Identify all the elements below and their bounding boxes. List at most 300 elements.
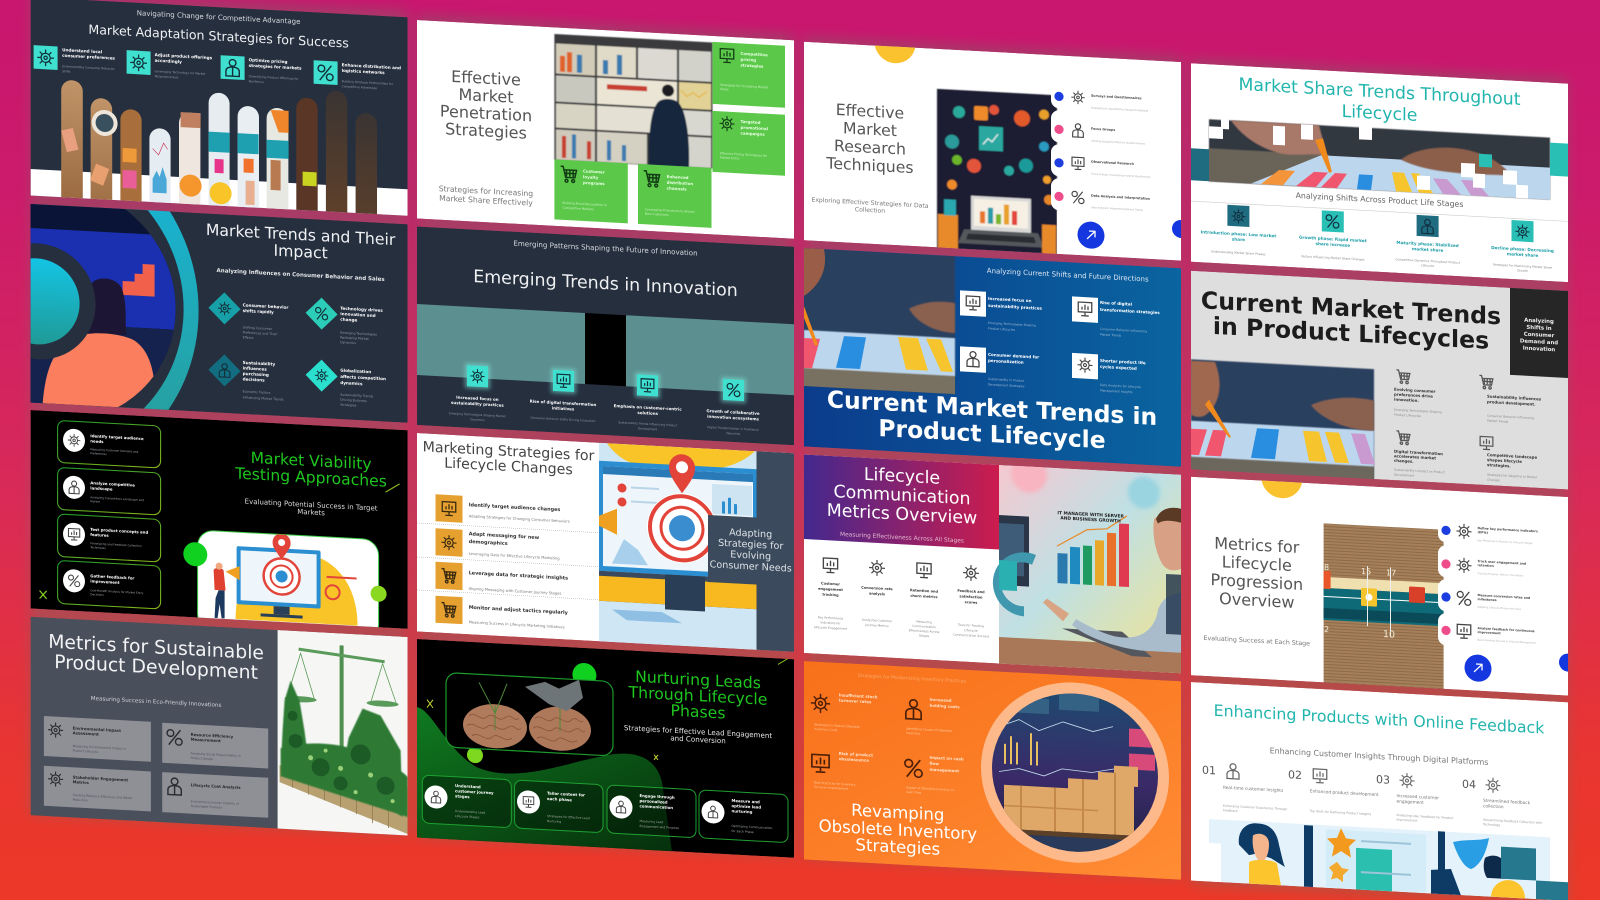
title: Lifecycle — [1222, 552, 1292, 575]
subtitle box: Innovation — [1523, 345, 1555, 353]
metric headings: Retention and — [910, 588, 938, 594]
title: Market — [458, 85, 514, 107]
metric notes: Lifecycle Engagement — [814, 625, 848, 631]
title: Current Market Trends in — [827, 385, 1157, 431]
card headings: Environmental Impact — [73, 725, 121, 733]
trend headings: Rise of digital transformation — [530, 399, 596, 407]
item headings: flow — [930, 761, 939, 766]
icon tiles — [960, 290, 1098, 379]
item headings: turnover rates — [839, 698, 872, 704]
box headings: needs — [90, 438, 104, 444]
phase headings: communication — [640, 803, 673, 810]
row notes: Benchmarking Success in Lifecycle Management — [1478, 639, 1536, 645]
influence headings: Technology drives — [340, 306, 383, 313]
metric headings — [818, 581, 985, 605]
item headings: accelerates market — [1394, 453, 1436, 460]
photo: IT manager with growth chart — [993, 455, 1181, 674]
strategy notes: Diversifying Product Offerings for — [249, 74, 299, 81]
row headings — [1478, 526, 1538, 637]
row notes: Data Analysis: Interpreting Market Trends — [1091, 206, 1144, 212]
slide: Current Market Trends in Product Lifecycles — [1191, 269, 1568, 490]
row headings: Leverage data for strategic insights — [469, 570, 568, 582]
row headings: Observational Research — [1091, 160, 1135, 166]
partial blue circle — [1559, 653, 1577, 672]
panel headings: promotional — [740, 125, 769, 131]
phase notes: Strategies for Effective Lead — [547, 814, 590, 820]
circle icons — [68, 434, 80, 587]
metric notes: Effectiveness Across — [909, 628, 940, 634]
item notes: Changes — [1487, 478, 1500, 482]
illustration: target on monitor — [599, 443, 757, 650]
card headings: Resource Efficiency — [191, 732, 233, 739]
trend headings: Shorter product life — [1100, 358, 1146, 365]
trend headings: Growth of collaborative — [706, 408, 760, 416]
trend notes: Dynamics — [470, 417, 485, 422]
step notes: Top Tools for Gathering Product Insights — [1309, 809, 1371, 816]
metric notes: Stages — [919, 633, 930, 638]
title: Effective — [836, 100, 904, 123]
trend notes: Emerging Technologies Shaping Market — [449, 411, 506, 418]
step notes: Technology — [1482, 822, 1500, 827]
box headings: Test product concepts and — [90, 527, 148, 535]
influence notes: Shifting Consumer — [243, 325, 272, 331]
step labels: engagement — [1396, 799, 1424, 806]
row notes: Leveraging Data for Effective Lifecycle Marketing — [469, 552, 560, 561]
panel headings: programs — [583, 180, 605, 186]
title: Market Adaptation Strategies for Success — [88, 22, 349, 51]
subtitle: Emerging Patterns Shaping the Future of Innovation — [513, 239, 698, 258]
subtitle box: Shifts in — [1526, 324, 1552, 332]
metric headings: analysis — [869, 591, 885, 596]
title: Revamping — [851, 801, 944, 825]
stage headings: market share — [1507, 251, 1538, 258]
item headings: Sustainability influences — [1487, 394, 1541, 402]
title: Product Development — [54, 652, 258, 684]
subtitle: Navigating Change for Competitive Advantage — [137, 9, 300, 26]
item notes: Identifying Causes of Obsolete — [906, 726, 952, 733]
white icon circles — [63, 428, 85, 593]
stage headings: Growth phase: Rapid market — [1299, 235, 1367, 243]
trend notes — [449, 411, 759, 437]
item notes — [1394, 408, 1538, 484]
subtitle box: Demand and — [1520, 337, 1558, 346]
phase headings — [455, 783, 761, 815]
card notes: Measuring Environmental Impact in — [73, 744, 126, 751]
trend notes: Development — [638, 426, 658, 431]
metric icons — [823, 557, 979, 581]
item headings: innovation. — [1394, 397, 1419, 403]
trend notes: Industries — [726, 431, 741, 436]
illustration: data network with laptop — [937, 89, 1057, 265]
trend headings: Emphasis on customer-centric — [614, 403, 682, 412]
phase notes: Understanding Lead — [455, 809, 485, 815]
blurred photo: chart and pencil — [804, 248, 955, 394]
title: Marketing Strategies for — [423, 439, 594, 465]
phase headings: personalized — [640, 798, 668, 805]
trend notes: Emerging Technologies Shaping — [988, 321, 1036, 327]
metric headings: churn metrics — [910, 594, 938, 599]
icon tiles — [467, 365, 744, 401]
subtitle: Evaluating Potential Success in Target — [245, 498, 378, 513]
trend headings — [988, 294, 1160, 372]
subtitle: and Conversion — [670, 733, 726, 745]
influence headings: affects competition — [340, 374, 386, 381]
card headings: Stakeholder Engagement — [73, 774, 128, 782]
box headings: Gather feedback for — [90, 573, 134, 581]
card headings: Lifecycle Cost Analysis — [191, 782, 241, 790]
metric notes: Measuring — [916, 620, 932, 624]
box notes: Decisions — [90, 592, 104, 597]
title: Lifecycle — [1342, 102, 1417, 126]
panel notes: Competitive Markets — [562, 206, 594, 211]
subtitle box: Consumer — [1524, 332, 1555, 339]
title: Strategies — [445, 119, 527, 143]
step labels: Streamlined feedback — [1483, 799, 1530, 806]
panel notes: Effective Pricing Techniques for — [720, 151, 767, 158]
row notes: Utilizing Engaging Effective Questionnaires — [1091, 140, 1146, 146]
influence notes: Preferences and Their — [243, 330, 278, 336]
phase headings: Measure and — [732, 798, 760, 804]
panel headings: Customer — [583, 168, 605, 175]
strategy notes: Responsiveness — [155, 74, 179, 79]
row headings — [469, 502, 569, 616]
stage notes — [1211, 250, 1552, 272]
item notes: Sustainability's Impact on Product — [1394, 468, 1445, 474]
row notes: Tracking Progress: Metrics That Matter — [1478, 572, 1523, 578]
subtitle box: Analyzing — [1524, 318, 1554, 325]
card notes: Sustainable Products — [191, 804, 222, 810]
panel headings: distribution — [667, 180, 693, 186]
card icons — [48, 722, 182, 795]
item headings: management — [930, 767, 959, 773]
metric notes: Analyzing Customer — [862, 618, 892, 623]
box notes — [89, 447, 144, 599]
box headings: features — [90, 532, 109, 538]
title: Testing Approaches — [234, 464, 387, 491]
metric notes: Lifecycle — [964, 628, 978, 633]
tile icons — [470, 369, 740, 397]
item notes: Impact of Obsolete Inventory on — [906, 785, 955, 792]
step numbers: 02 — [1288, 768, 1302, 782]
yellow circle — [1261, 456, 1302, 499]
trend headings: personalization — [988, 358, 1024, 365]
accent marks — [427, 637, 792, 767]
metric notes: Key Performance — [818, 615, 843, 621]
stage headings: Introduction phase: Low market — [1201, 229, 1276, 238]
photo band: hands drawing on chart — [1209, 119, 1550, 200]
gradient header — [804, 454, 999, 549]
ring inner — [0, 144, 184, 458]
title: Metrics for Sustainable — [48, 632, 264, 664]
metric headings: satisfaction — [959, 594, 983, 600]
white row tabs — [1438, 510, 1578, 703]
influence headings: change — [340, 317, 357, 323]
strategy labels — [62, 47, 401, 76]
card notes: Evaluating Economic Viability of — [191, 799, 239, 806]
item notes: Product Lifecycles — [1394, 413, 1422, 418]
step numbers — [1202, 764, 1476, 791]
photo: woman viewing dashboard — [0, 174, 176, 432]
title: Techniques — [825, 153, 914, 177]
subtitle: Collection — [855, 206, 885, 215]
metric cards — [44, 716, 268, 818]
row headings: Surveys and Questionnaires — [1091, 94, 1142, 100]
slide: Metrics for Lifecycle Progression Overview — [1191, 452, 1578, 707]
step labels: Increased customer — [1396, 794, 1439, 801]
icons in tiles — [37, 49, 333, 82]
subtitle: Enhancing Customer Insights Through Digital Platforms — [1270, 746, 1488, 767]
item notes: Inventory — [906, 731, 921, 736]
trend notes: Sustainability Trends Influencing Product — [618, 420, 677, 427]
row icons — [1456, 523, 1472, 639]
item notes: Strategies to Reduce Obsolete — [814, 723, 860, 729]
panel headings: channels — [667, 186, 687, 192]
slide: Nurturing Leads Through Lifecycle Phases — [417, 636, 794, 858]
trend headings: Rise of digital — [1100, 300, 1132, 307]
illustration: people rating products — [1191, 818, 1568, 900]
stage notes: Competitive Dynamics Throughout Product — [1395, 257, 1460, 265]
card notes — [72, 744, 241, 811]
green panels — [554, 33, 785, 232]
title: Product Lifecycle — [878, 414, 1106, 454]
phase notes: Engagement and Progress — [640, 824, 679, 830]
phase headings: stages — [455, 793, 470, 799]
slide: Market Share Trends Throughout Lifecycle — [1191, 63, 1568, 282]
item headings: shapes lifecycle — [1487, 457, 1522, 464]
caption box: Strategies for — [718, 538, 783, 552]
influence headings: purchasing — [243, 371, 269, 377]
metric notes: Journey Metrics — [864, 623, 889, 628]
item icons — [1396, 370, 1493, 450]
influence notes: Emerging Technologies — [340, 331, 377, 337]
item headings: Impact on cash — [930, 755, 964, 762]
row notes: Adapting Strategies for Changing Consumer Behaviors — [469, 514, 570, 524]
title: Market Share Trends Throughout — [1238, 75, 1521, 110]
step notes: Analyzing User Feedback for Product — [1396, 813, 1453, 820]
subtitle: Evaluating Success at Each Stage — [1204, 635, 1310, 648]
item headings: Competitive landscape — [1487, 452, 1537, 460]
subtitle: Market Share Effectively — [439, 194, 533, 208]
stage headings: share increase — [1315, 241, 1350, 248]
strategy labels: Enhance distribution and — [342, 62, 401, 70]
stage headings: market share — [1412, 246, 1443, 253]
stage headings — [1201, 229, 1554, 259]
trend notes: Consumer Behavior Shifts Driving Innovation — [530, 416, 596, 423]
subtitle: Measuring Effectiveness Across All Stages — [840, 531, 964, 545]
item headings: product development. — [1487, 399, 1536, 407]
strategy labels: Adjust product offerings — [155, 52, 212, 60]
strategy labels: accordingly — [155, 58, 182, 64]
row notes: Key Milestones to Monitor for Lifecycle Stages — [1478, 539, 1533, 545]
title: Overview — [1219, 589, 1294, 612]
phase notes: for Each Phase — [732, 829, 754, 834]
title: Metrics for — [1214, 533, 1299, 557]
trend notes: Market Trends — [1100, 332, 1121, 338]
step numbers: 01 — [1202, 764, 1216, 777]
caption box: Consumer Needs — [710, 559, 792, 575]
dark side band — [756, 451, 794, 652]
partial blue circle — [1172, 220, 1181, 238]
step labels: Real-time customer insights — [1223, 785, 1284, 794]
step notes: Enhancing Customer Experience Through — [1223, 804, 1287, 811]
box notes: Techniques — [89, 545, 106, 550]
row headings: demographics — [469, 539, 508, 547]
title: Through Lifecycle — [628, 682, 767, 709]
title: Nurturing Leads — [635, 667, 761, 693]
row headings: Monitor and adjust tactics regularly — [469, 605, 569, 616]
stage headings: share — [1232, 236, 1245, 242]
left teal circle — [0, 256, 80, 347]
white icon circles — [424, 785, 724, 824]
card notes: Product Lifecycle — [73, 749, 98, 754]
item headings: Insufficient stock — [839, 692, 877, 699]
box headings: landscape — [90, 485, 113, 492]
item headings: holding costs — [930, 703, 960, 709]
card notes: Reduction — [73, 798, 88, 802]
box notes: Cost-Benefit Analysis for Market Entry — [90, 588, 143, 595]
box headings: Analyze competitive — [90, 480, 135, 488]
panel notes: Building Brand Recognition in — [562, 201, 607, 207]
subtitle: Markets — [297, 508, 325, 517]
card headings: Metrics — [73, 779, 90, 785]
panel headings: strategies — [740, 63, 764, 69]
box notes: Measuring Customer Demand and — [90, 447, 138, 454]
item notes: Market Trends — [1487, 419, 1508, 424]
slide: Market Trends and Their Impact — [30, 204, 408, 423]
strategy notes — [62, 64, 394, 91]
row headings: improvement — [1478, 630, 1501, 635]
subtitle: Analyzing Current Shifts and Future Directions — [987, 267, 1149, 284]
circle icons — [431, 791, 718, 818]
stage icons — [1227, 205, 1534, 243]
metric notes — [814, 614, 990, 641]
strategy labels: logistics networks — [342, 68, 385, 75]
trend headings: Increased focus on — [456, 395, 499, 402]
slide: Lifecycle Communication Metrics Overview — [804, 444, 1181, 674]
subtitle: Strategies for Increasing — [439, 184, 533, 198]
row icons — [1071, 90, 1085, 204]
phase notes: Nurturing — [547, 819, 561, 824]
metric notes: Communication — [912, 624, 936, 629]
phase headings: Tailor content for — [547, 790, 585, 798]
strategy notes: Resilience — [249, 79, 264, 84]
card headings — [73, 725, 241, 793]
influence headings: innovation and — [340, 311, 376, 318]
card notes: Tracking Resource Efficiency and Waste — [73, 793, 132, 800]
influence notes: Reshaping Market — [340, 335, 370, 341]
strategy notes: Building Strategic Partnerships for — [342, 79, 393, 86]
strategy notes: Shifts — [62, 69, 71, 74]
slide: Metrics for Sustainable Product Development — [31, 617, 408, 836]
title: Lifecycle Changes — [444, 455, 573, 478]
caption box: Adapting — [729, 527, 772, 541]
photo: timeline on wood — [1324, 523, 1444, 700]
panel headings: Targeted — [740, 119, 760, 125]
phase headings: nurturing — [732, 808, 753, 814]
metric notes: Indicators for — [821, 620, 841, 626]
card notes: Assessing Social Responsibility in — [191, 751, 241, 758]
influence notes: Influencing Market Trends — [243, 395, 284, 402]
strategy labels: Understand local — [62, 47, 102, 54]
white row tabs — [1051, 94, 1181, 260]
influence headings: dynamics — [340, 380, 363, 386]
trend headings: transformation strategies — [1100, 307, 1160, 315]
step labels: Enhanced product development — [1310, 788, 1379, 798]
title: Phases — [670, 701, 726, 723]
title: Current Market Trends — [1201, 286, 1501, 330]
influence notes: Economic Factors — [243, 389, 270, 395]
title: Market Viability — [251, 449, 372, 473]
strategy notes: Competitive Advantage — [342, 84, 377, 90]
row bullets — [1054, 92, 1064, 201]
panel icons — [561, 40, 734, 191]
trend notes: Data Analytics for Lifecycle — [1100, 383, 1141, 389]
slide: Effective Market Research Techniques — [804, 42, 1181, 260]
influence headings: Consumer behavior — [243, 302, 288, 310]
trend notes: Digital Transformation in Traditional — [707, 425, 759, 432]
strategy notes: Leveraging Technology for Market — [155, 69, 205, 76]
card notes: Product Design — [191, 756, 213, 761]
row headings: Track user engagement and — [1478, 559, 1526, 566]
photo frame: brains and watering can — [446, 656, 613, 771]
subtitle: Analyzing Shifts Across Product Life Stages — [1296, 191, 1463, 209]
item headings — [839, 692, 964, 774]
metric headings: Customer — [821, 581, 840, 586]
trend headings: sustainability practices — [988, 303, 1042, 311]
panel headings: loyalty — [583, 174, 599, 180]
caption box — [708, 515, 794, 587]
stage notes: Understanding Market Share Phases — [1211, 249, 1266, 256]
title: Metrics Overview — [827, 501, 977, 529]
photo: green scales and forest — [278, 630, 408, 836]
step notes — [1223, 804, 1542, 829]
title: Strategies — [855, 835, 940, 859]
metric headings: scores — [965, 600, 977, 605]
teal ring — [0, 109, 199, 493]
step notes: Streamlining Feedback Collection with — [1483, 818, 1542, 825]
panel notes: New Customers — [645, 212, 669, 217]
phase notes: Measuring Lead — [640, 819, 663, 824]
white footer strip — [31, 169, 408, 216]
subtitle: Strategies for Effective Lead Engagement — [624, 723, 772, 740]
item headings: Increased — [930, 697, 952, 703]
slide: Enhancing Products with Online Feedback — [1191, 682, 1568, 900]
item notes: Development — [1394, 473, 1415, 478]
title: Research — [834, 136, 906, 159]
divider — [1191, 201, 1568, 222]
row notes: Aligning Messaging with Customer Journey Stages — [469, 587, 561, 596]
photo: timeline on wood: 15 — [1361, 567, 1371, 576]
panel headings: pricing — [740, 57, 756, 63]
phase headings: Understand — [455, 783, 481, 789]
slide: Market Viability Testing Approaches — [31, 410, 408, 641]
blurred photo: chart and pencil — [1191, 359, 1375, 480]
influence notes: Driving Business — [340, 398, 367, 403]
item headings: Evolving consumer — [1394, 387, 1435, 394]
row headings — [1091, 94, 1151, 201]
row headings: Focus Groups — [1091, 127, 1115, 132]
row notes: Measuring Success in Lifecycle Marketing Initiatives — [469, 620, 565, 629]
subtitle: Analyzing Influences on Consumer Behavior and Sales — [217, 267, 385, 283]
title: Market — [843, 118, 897, 140]
panel notes: Leveraging Promotions to Attract — [645, 207, 695, 214]
step labels — [1223, 784, 1531, 812]
title: Communication — [833, 482, 971, 509]
influence notes: Effects — [243, 335, 254, 340]
photo: IT manager with growth chart: AND BUSINESS GROWTH — [1060, 515, 1121, 525]
row notes — [1478, 539, 1536, 645]
trend notes: Sustainability in Product — [988, 377, 1024, 383]
